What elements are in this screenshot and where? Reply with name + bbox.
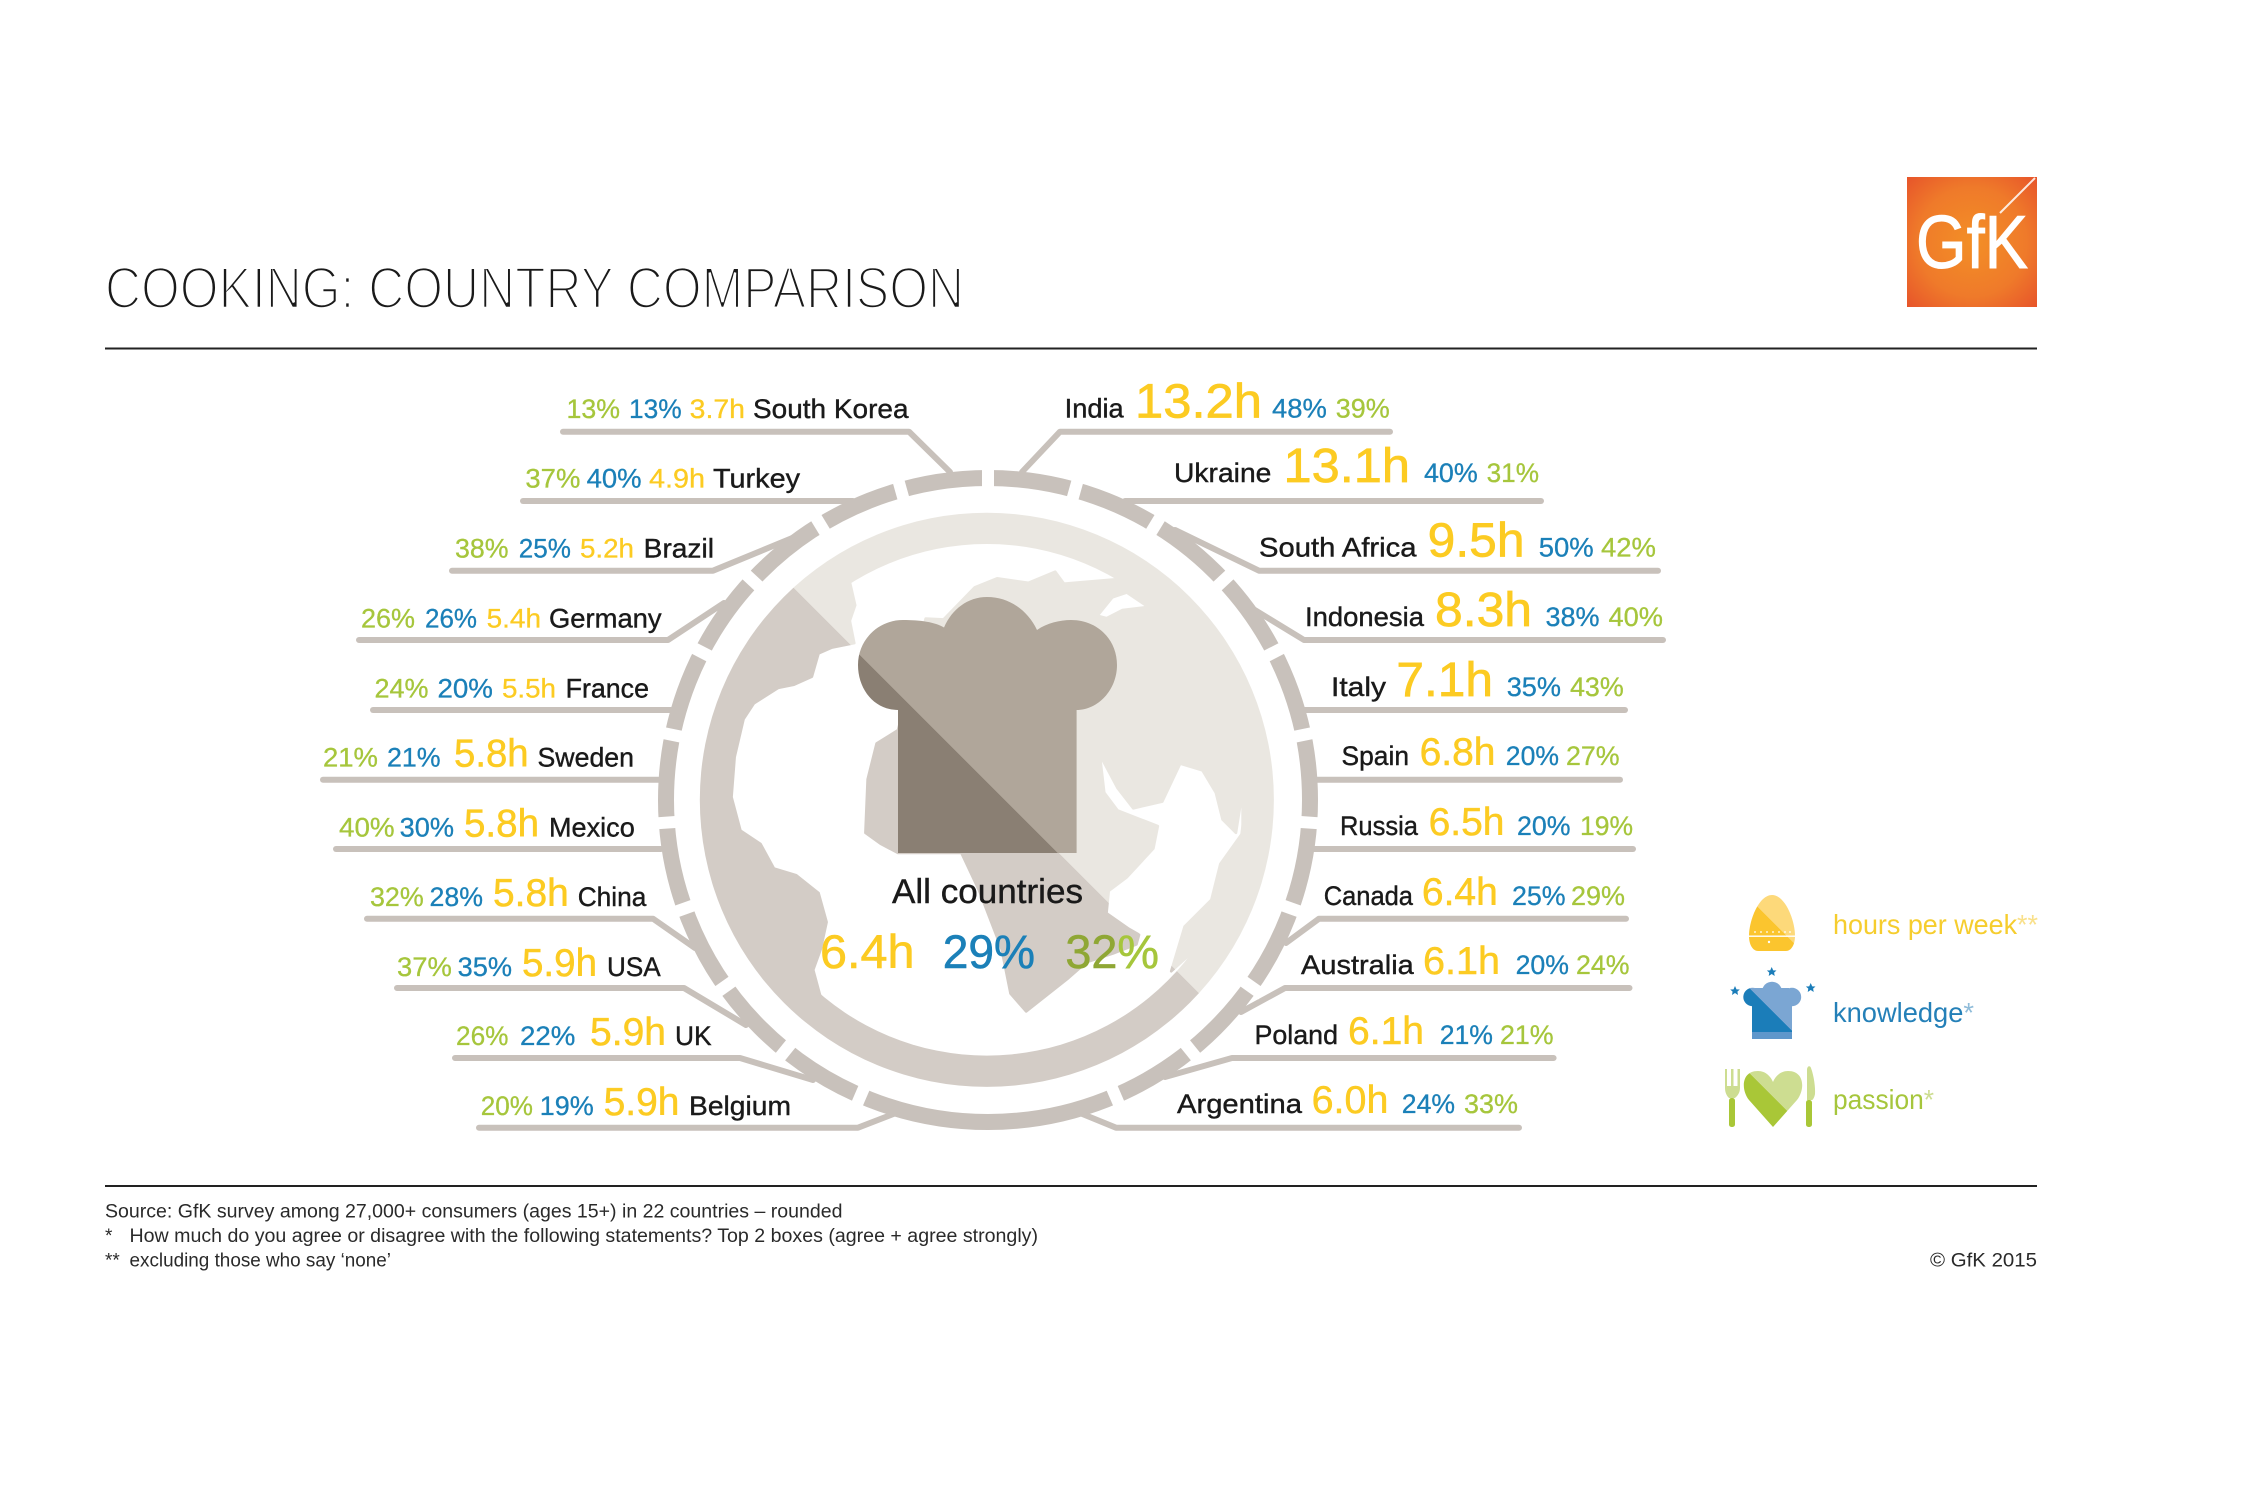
row: Spain: 6.8h [1420, 731, 1496, 774]
row: Mexico: Mexico [549, 813, 635, 843]
row: South Korea: South Korea [753, 394, 910, 424]
row: South Africa [1175, 515, 1658, 571]
row: India: 39% [1336, 393, 1390, 423]
row: South Korea: 3.7h [690, 394, 745, 424]
row: Germany: 26% [425, 603, 477, 633]
row: Argentina: 6.0h [1312, 1079, 1388, 1122]
legend: passion [1725, 1066, 1934, 1127]
row: Poland: 6.1h [1348, 1010, 1424, 1053]
row: South Africa: 50% [1539, 533, 1594, 563]
all countries values: 32% [1065, 925, 1159, 978]
row: Spain: 27% [1566, 741, 1620, 771]
row: Belgium: 20% [481, 1091, 533, 1121]
all countries heading: All countries [892, 873, 1083, 911]
legend: hours per week [1749, 895, 2038, 951]
row: Argentina: 33% [1464, 1089, 1518, 1119]
legend: knowledge [1730, 967, 1974, 1039]
copyright: © GfK 2015 [1930, 1251, 2037, 1272]
row: Russia [1313, 801, 1633, 849]
logo: GfK [1907, 177, 2037, 307]
row: UK: UK [675, 1021, 712, 1051]
row: Turkey: 37% [525, 463, 580, 493]
row: Indonesia: 38% [1546, 602, 1600, 632]
source notes: excluding those who say ‘none’ [130, 1251, 391, 1272]
title: COOKING: COUNTRY COMPARISON [105, 256, 964, 321]
row: France: 24% [374, 673, 428, 703]
icon: chef hat with stars [1730, 967, 1815, 1039]
legend: knowledge: knowledge* [1833, 997, 1974, 1028]
row: Russia: 6.5h [1429, 801, 1504, 844]
central chef hat [858, 597, 1117, 853]
row: Brazil: 38% [455, 533, 508, 563]
row: Italy: 43% [1570, 672, 1624, 702]
row: France [373, 673, 672, 710]
row: UK: 22% [520, 1021, 575, 1051]
row: Poland: 21% [1440, 1020, 1493, 1050]
row: Ukraine: 40% [1424, 458, 1478, 488]
row: Indonesia [1250, 584, 1663, 640]
row: France: France [566, 673, 649, 703]
row: Italy: 7.1h [1396, 654, 1493, 707]
row: Sweden: 5.8h [454, 733, 529, 776]
source notes [105, 1202, 1038, 1272]
row: Ukraine: 31% [1487, 458, 1539, 488]
row: Mexico: 40% [339, 813, 395, 843]
row: Russia: Russia [1340, 811, 1419, 841]
row: Poland: 21% [1500, 1020, 1554, 1050]
row: Australia: 20% [1516, 950, 1569, 980]
row: USA: USA [607, 952, 661, 982]
source notes: How much do you agree or disagree with the following statements? Top 2 boxes (agree + agree strongly) [130, 1226, 1038, 1247]
row: Sweden: 21% [387, 743, 441, 773]
row: France: 5.5h [502, 673, 556, 703]
source notes: * [105, 1226, 113, 1247]
row: Italy: Italy [1331, 672, 1387, 702]
row: Australia: 6.1h [1423, 940, 1500, 983]
row: India: India [1065, 393, 1125, 423]
source notes: ** [105, 1251, 120, 1272]
row: Ukraine: 13.1h [1284, 440, 1410, 493]
row: Germany: 5.4h [487, 603, 541, 633]
row: Sweden [323, 733, 663, 780]
row: South Africa: 9.5h [1428, 515, 1524, 568]
row: Italy [1304, 654, 1625, 710]
icon: egg timer [1749, 895, 1795, 951]
row: Mexico: 30% [400, 813, 454, 843]
row: USA: 35% [458, 952, 512, 982]
row: Australia: Australia [1301, 950, 1415, 980]
row: Mexico: 5.8h [464, 803, 539, 846]
row: Belgium: Belgium [689, 1091, 791, 1121]
row: UK: 26% [456, 1021, 508, 1051]
land: Americas [707, 582, 855, 998]
footer rule [105, 1185, 2037, 1187]
row: South Africa: 42% [1601, 533, 1656, 563]
all countries values: 29% [943, 925, 1035, 978]
row: Indonesia: 40% [1608, 602, 1663, 632]
land: Eurasia and Africa [865, 572, 1265, 1011]
row: Ukraine: Ukraine [1174, 458, 1271, 488]
row: China: 5.8h [493, 872, 569, 915]
row: India: 48% [1272, 393, 1327, 423]
header rule [105, 348, 2037, 350]
row: South Korea: 13% [629, 394, 682, 424]
row: Brazil: 5.2h [580, 533, 634, 563]
row: China: China [578, 882, 647, 912]
row: Italy: 35% [1507, 672, 1561, 702]
row: Argentina: 24% [1402, 1089, 1455, 1119]
row: Canada: Canada [1324, 881, 1414, 911]
row: Canada: 25% [1512, 881, 1566, 911]
row: Sweden: 21% [323, 743, 378, 773]
row: UK [455, 1011, 813, 1080]
all countries values: 6.4h [820, 925, 914, 978]
all countries values [820, 925, 1159, 978]
row: Poland: Poland [1254, 1020, 1338, 1050]
row: India: 13.2h [1135, 375, 1262, 428]
icon: heart with fork and knife [1725, 1066, 1815, 1127]
row: South Korea [563, 394, 950, 472]
globe [700, 513, 1274, 1087]
row: Russia: 20% [1517, 811, 1570, 841]
row: Ukraine [1125, 440, 1541, 501]
row: USA: 37% [397, 952, 452, 982]
row: Sweden: Sweden [538, 743, 634, 773]
row: Brazil: 25% [519, 533, 571, 563]
row: Argentina [1080, 1079, 1519, 1128]
row: Canada: 6.4h [1422, 871, 1498, 914]
row: USA: 5.9h [522, 942, 597, 985]
row: USA [397, 942, 746, 1025]
row: Australia: 24% [1576, 950, 1630, 980]
row: Canada [1286, 871, 1626, 943]
segmented outer ring [652, 464, 1324, 1122]
legend: hours per week: hours per week** [1833, 909, 2038, 940]
row: South Africa: South Africa [1259, 533, 1418, 563]
row: Belgium: 5.9h [604, 1081, 680, 1124]
row: Spain: 20% [1506, 741, 1559, 771]
land: northern inlet [1100, 594, 1144, 617]
row: Canada: 29% [1571, 881, 1625, 911]
logo: GfK: GfK [1916, 200, 2028, 284]
row: Germany: Germany [549, 603, 662, 633]
row: Spain: Spain [1342, 741, 1409, 771]
source notes: Source: GfK survey among 27,000+ consumers (ages 15+) in 22 countries – rounded [105, 1202, 842, 1223]
row: China [367, 872, 695, 948]
row: Australia [1241, 940, 1630, 1012]
row: UK: 5.9h [590, 1011, 666, 1054]
row: South Korea: 13% [566, 394, 620, 424]
row: India [1022, 375, 1390, 472]
row: Brazil [452, 533, 802, 571]
row: Turkey: 4.9h [649, 463, 705, 493]
row: China: 32% [370, 882, 424, 912]
row: Indonesia: Indonesia [1305, 602, 1425, 632]
row: Spain [1315, 731, 1620, 780]
row: Russia: 19% [1580, 811, 1633, 841]
row: Argentina: Argentina [1177, 1089, 1303, 1119]
row: Belgium: 19% [540, 1091, 594, 1121]
row: China: 28% [430, 882, 483, 912]
row: Germany: 26% [361, 603, 415, 633]
row: Poland [1165, 1010, 1554, 1077]
row: Turkey: Turkey [713, 463, 801, 493]
row: Indonesia: 8.3h [1435, 584, 1532, 637]
row: Belgium [479, 1081, 896, 1128]
row: France: 20% [438, 673, 493, 703]
row: Germany [359, 603, 724, 640]
row: Brazil: Brazil [644, 533, 714, 563]
row: Mexico [336, 803, 661, 849]
legend: passion: passion* [1833, 1084, 1934, 1115]
row: Turkey: 40% [587, 463, 642, 493]
row: Turkey [523, 463, 853, 501]
